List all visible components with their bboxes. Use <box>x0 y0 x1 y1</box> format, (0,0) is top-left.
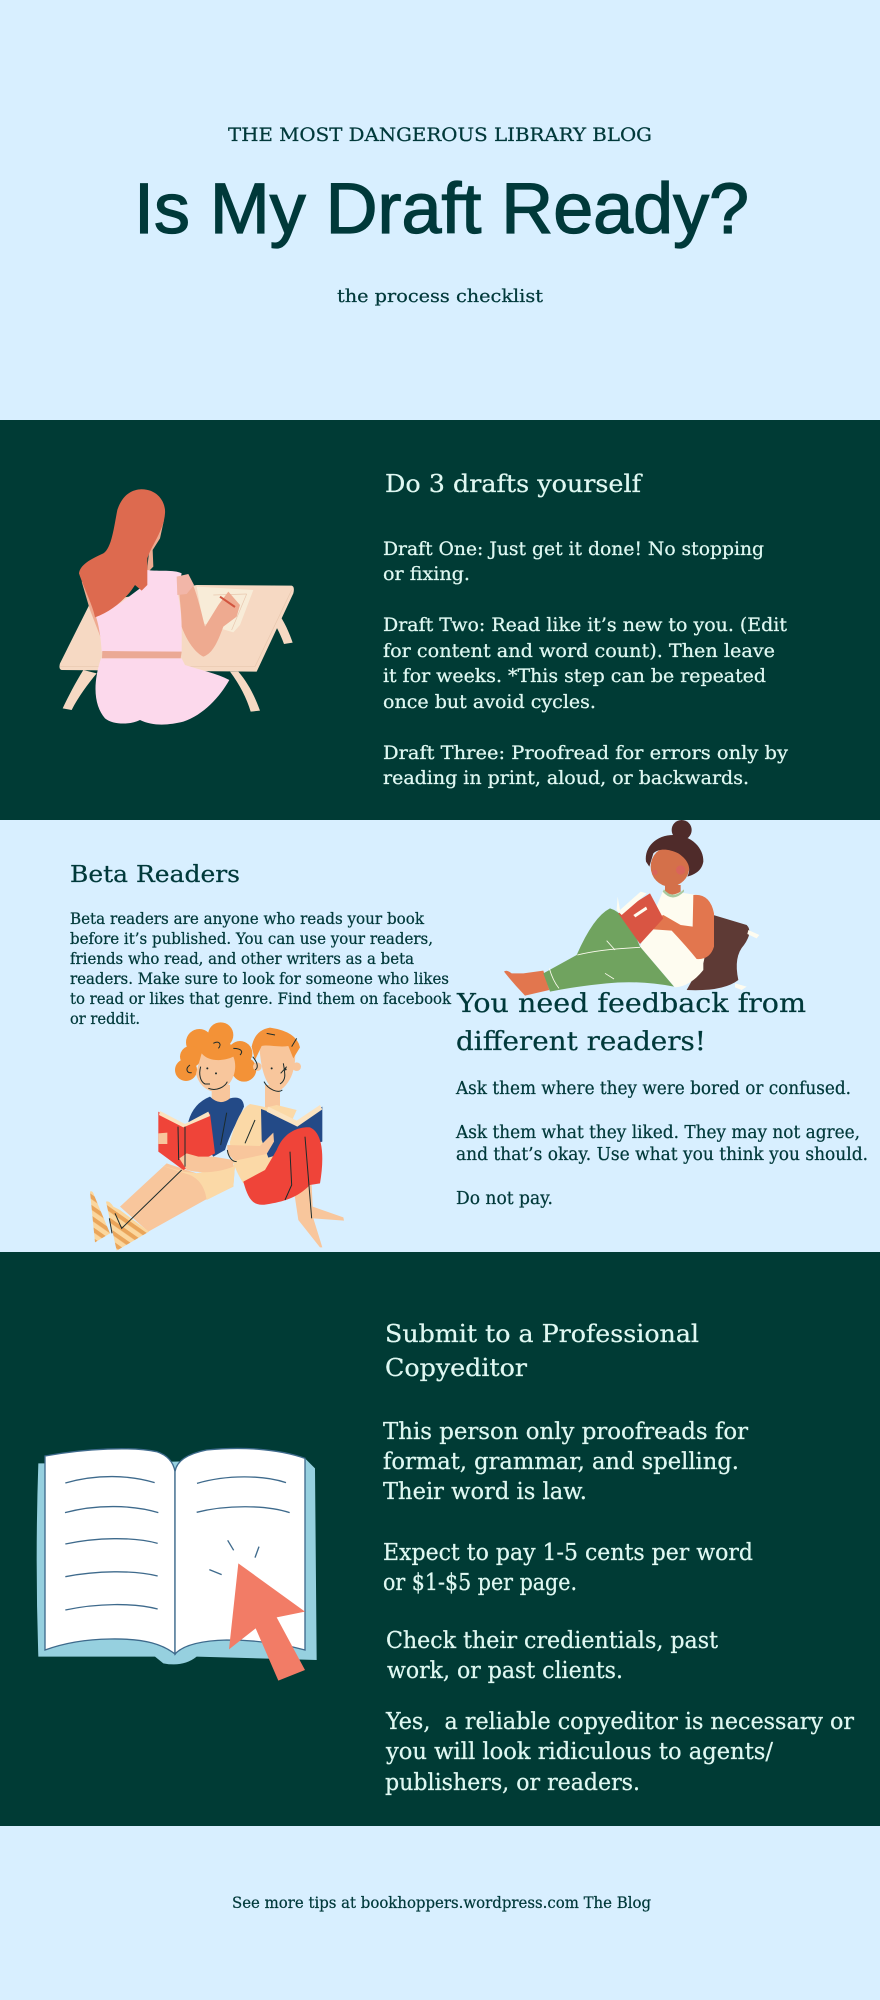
text: draft one: or fixing. <box>383 563 470 585</box>
panel: beta readers <box>0 820 880 1252</box>
text: draft two: for content and word count). Then leave <box>383 640 775 662</box>
illustration: woman reading against a pillow <box>504 820 759 996</box>
heading: submit to a professional copyeditor: Copyeditor <box>385 1354 528 1382</box>
text: beta readers description: friends who read, and other writers as a beta <box>70 950 414 968</box>
illustration: open book with cursor arrow <box>37 1448 317 1681</box>
text: credentials: Check their credientials, past <box>386 1628 719 1654</box>
text: draft three: Draft Three: Proofread for errors only by <box>383 742 788 764</box>
heading: you need feedback: different readers! <box>456 1027 706 1057</box>
text: do not pay: Do not pay. <box>456 1189 553 1209</box>
text: reliable copyeditor: Yes, a reliable copyeditor is necessary or <box>385 1709 854 1735</box>
heading: submit to a professional copyeditor: Submit to a Professional <box>385 1320 699 1348</box>
panel: header <box>0 0 880 420</box>
girl <box>120 1163 235 1232</box>
text: proofreads: Their word is law. <box>383 1479 587 1505</box>
text: pricing: or $1-$5 per page. <box>383 1570 577 1596</box>
text: ask them where: Ask them where they were bored or confused. <box>455 1079 851 1099</box>
text: draft two: Draft Two: Read like it’s new to you. (Edit <box>383 614 787 636</box>
text: draft one: Draft One: Just get it done! No stopping <box>383 538 764 560</box>
text: beta readers description <box>70 910 452 1028</box>
text: ask them what: Ask them what they liked. They may not agree, <box>455 1123 860 1143</box>
text: draft three: reading in print, aloud, or backwards. <box>383 767 749 789</box>
text: ask them what: and that’s okay. Use what you think you should. <box>456 1145 868 1165</box>
text: beta readers description: to read or likes that genre. Find them on facebook <box>70 990 452 1008</box>
text: reliable copyeditor: publishers, or readers. <box>385 1770 640 1796</box>
blog name: THE MOST DANGEROUS LIBRARY BLOG <box>228 124 652 146</box>
illustration: two people reading back to back <box>90 1022 344 1251</box>
text: draft one <box>383 538 764 585</box>
panel: footer <box>0 1826 880 2000</box>
text: credentials <box>386 1628 719 1684</box>
heading: you need feedback <box>456 989 806 1057</box>
heading: do 3 drafts yourself: Do 3 drafts yourself <box>385 470 643 498</box>
text: proofreads <box>383 1419 748 1505</box>
text: ask them what <box>455 1123 868 1165</box>
footer text: See more tips at bookhoppers.wordpress.com The Blog <box>232 1893 651 1912</box>
heading: beta readers: Beta Readers <box>70 862 240 888</box>
text: draft two: it for weeks. *This step can be repeated <box>383 665 766 687</box>
text: proofreads: This person only proofreads for <box>383 1419 748 1445</box>
title: Is My Draft Ready? <box>134 170 749 249</box>
heading: submit to a professional copyeditor <box>385 1320 699 1382</box>
boy <box>293 1185 344 1247</box>
text: beta readers description: Beta readers are anyone who reads your book <box>70 910 425 928</box>
panel: do 3 drafts <box>0 420 880 820</box>
text: beta readers description: or reddit. <box>70 1010 140 1028</box>
text: draft three <box>383 742 788 789</box>
illustration: woman writing at a desk <box>59 489 294 725</box>
text: draft two <box>383 614 787 713</box>
subtitle: the process checklist <box>337 286 544 307</box>
text: pricing: Expect to pay 1-5 cents per word <box>383 1540 753 1566</box>
text: draft two: once but avoid cycles. <box>383 691 596 713</box>
text: pricing <box>383 1540 753 1596</box>
text: reliable copyeditor: you will look ridiculous to agents/ <box>385 1739 773 1765</box>
text: credentials: work, or past clients. <box>387 1658 623 1684</box>
panel: copyeditor <box>0 1252 880 1826</box>
text: reliable copyeditor <box>385 1709 854 1796</box>
text: proofreads: format, grammar, and spelling. <box>383 1449 739 1475</box>
heading: you need feedback: You need feedback from <box>456 989 806 1019</box>
text: beta readers description: readers. Make sure to look for someone who likes <box>70 970 449 988</box>
text: beta readers description: before it’s published. You can use your readers, <box>70 930 433 948</box>
